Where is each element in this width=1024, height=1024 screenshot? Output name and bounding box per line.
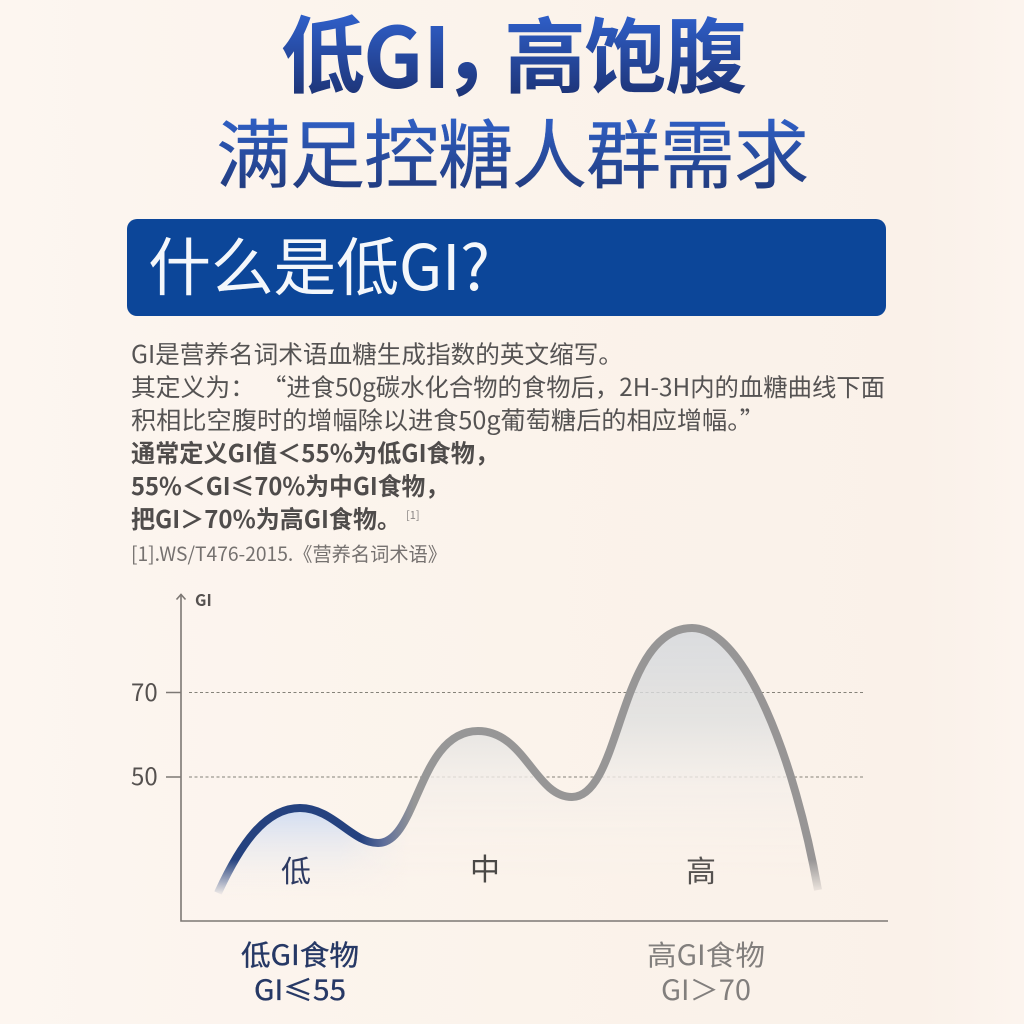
low GI caption (241, 934, 359, 1009)
area under low curve (240, 812, 369, 862)
title line 2: 满足控糖人群需求 (216, 95, 809, 204)
reference lines (189, 692, 863, 777)
bold GI ranges: 55%＜GI≤70%为中GI食物， (131, 468, 449, 503)
title (216, 0, 809, 204)
area under medium and high curves (431, 632, 786, 778)
definition text: 其定义为： (131, 369, 255, 404)
definition text: 积相比空腹时的增幅除以进食50g葡萄糖后的相应增幅。” (131, 402, 765, 437)
GI curve (218, 628, 818, 893)
label high: 高 (686, 847, 716, 891)
label medium: 中 (470, 845, 500, 889)
footnote marker: [1] (406, 507, 420, 523)
high GI caption: 高GI食物 (647, 934, 765, 974)
low GI caption: 低GI食物 (241, 934, 359, 974)
high GI caption: GI＞70 (661, 969, 751, 1009)
banner heading: 什么是低GI? (148, 218, 490, 309)
bold GI ranges (131, 435, 499, 536)
definition text: “进食50g碳水化合物的食物后，2H-3H内的血糖曲线下面 (262, 369, 885, 404)
GI chart (131, 587, 888, 921)
axes (166, 594, 888, 921)
definition text (131, 336, 885, 437)
bold GI ranges: 通常定义GI值＜55%为低GI食物， (131, 435, 499, 470)
tick label 50: 50 (131, 757, 158, 792)
high GI caption (647, 934, 765, 1009)
tick label 70: 70 (131, 673, 158, 708)
definition text: GI是营养名词术语血糖生成指数的英文缩写。 (131, 336, 623, 371)
bold GI ranges: 把GI＞70%为高GI食物。 (131, 501, 401, 536)
title line 1 (281, 0, 747, 113)
section banner (127, 218, 886, 316)
label low: 低 (281, 847, 311, 891)
reference note: [1].WS/T476-2015.《营养名词术语》 (131, 538, 447, 567)
axis label: GI (195, 587, 212, 611)
low GI caption: GI≤55 (254, 969, 346, 1009)
